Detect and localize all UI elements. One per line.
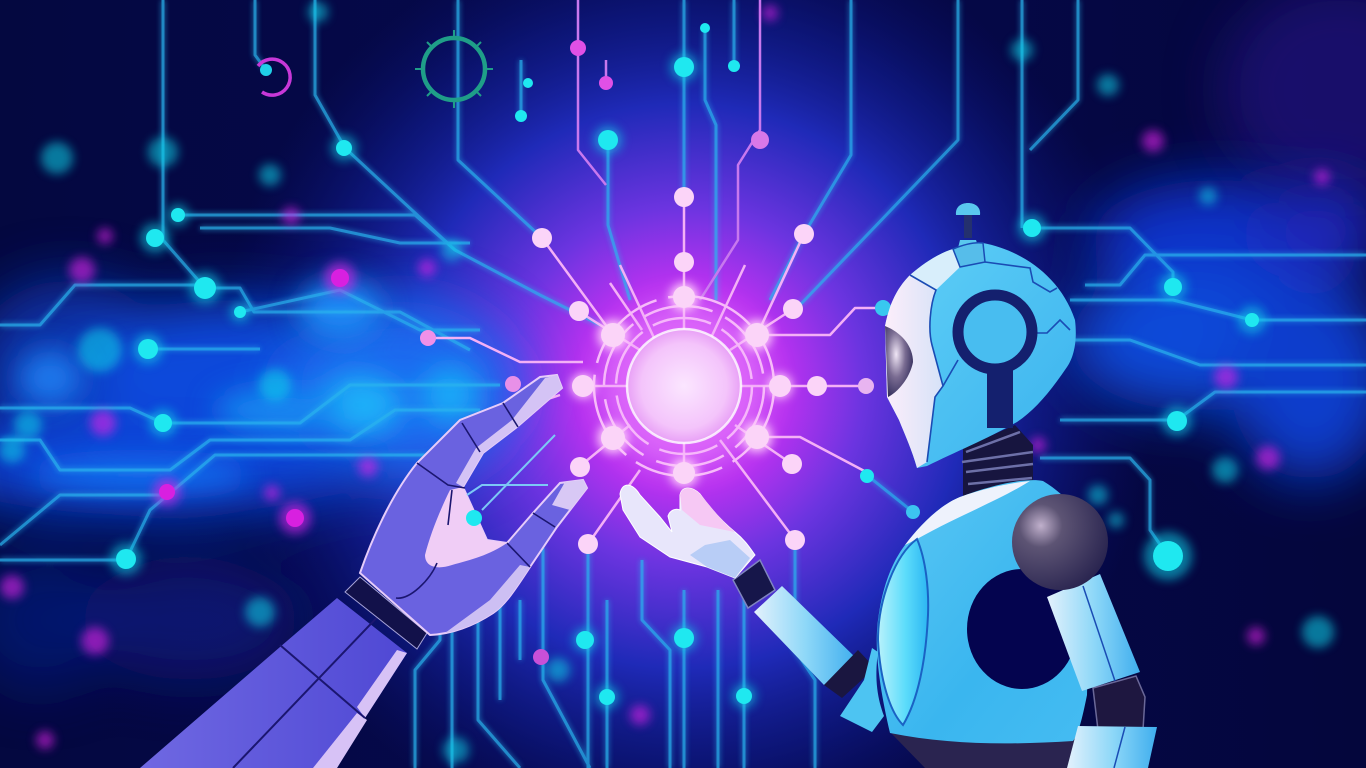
- right cloud: [1070, 180, 1366, 480]
- palm and fingers: [620, 485, 755, 578]
- upper arm: [1047, 574, 1140, 691]
- forearm: [140, 598, 407, 768]
- cuff highlight: [357, 650, 407, 718]
- side panel: [878, 539, 928, 725]
- ear ring: [958, 295, 1032, 369]
- human-style robotic arm: [140, 375, 587, 768]
- elbow: [824, 650, 875, 698]
- shoulder ball: [1012, 494, 1108, 590]
- pelvis: [890, 732, 1076, 768]
- palm blue shade: [690, 540, 750, 578]
- circuit lines: top magenta: [578, 0, 760, 300]
- forearm plate: [754, 586, 856, 685]
- eye: [885, 326, 913, 397]
- cyan node cores: [116, 23, 1259, 705]
- chest dark circle: [967, 569, 1077, 689]
- crown plate white: [910, 249, 960, 290]
- thumb highlight: [552, 480, 587, 510]
- elbow plate: [840, 648, 884, 732]
- rings around the core: [594, 296, 774, 476]
- white face plate: [885, 275, 943, 468]
- robot arm and hand: [620, 485, 884, 732]
- circuit rings and hub nodes: [505, 187, 874, 554]
- hand: [360, 375, 587, 635]
- lower arm: [1067, 726, 1157, 768]
- ear stem: [987, 360, 1013, 428]
- left cloud: [0, 280, 520, 690]
- antenna base plate: [953, 243, 985, 267]
- robot body: [877, 425, 1157, 768]
- hand seams: [396, 403, 555, 598]
- head panel seams: [910, 262, 1070, 462]
- pink nodes: [505, 187, 874, 554]
- hub node halos: [571, 283, 792, 487]
- small cyan accents over the hand gap: [466, 435, 555, 526]
- left cloud highlights: [18, 280, 480, 491]
- arm seams: [233, 607, 387, 768]
- circuit lines: pink near core: [428, 197, 885, 544]
- elbow joint: [1093, 676, 1145, 730]
- head shell: [885, 243, 1076, 468]
- icon: magenta ring with cyan dot: [258, 59, 290, 95]
- robot head: [885, 203, 1076, 468]
- neck: [962, 425, 1033, 500]
- palm pink tint: [680, 488, 735, 532]
- palm highlight: [425, 487, 507, 567]
- palm lower highlight: [445, 565, 530, 633]
- icon: green spiked ring: [415, 30, 493, 108]
- core halo: [599, 301, 769, 471]
- wrist: [733, 560, 775, 608]
- antenna: [956, 203, 980, 248]
- wrist band: [345, 577, 427, 649]
- magenta node cores: [159, 40, 769, 665]
- torso shoulder highlight: [905, 481, 1030, 545]
- lower highlight: [313, 713, 367, 768]
- torso: [877, 480, 1090, 743]
- central orb: [627, 329, 741, 443]
- finger highlight: [456, 375, 562, 487]
